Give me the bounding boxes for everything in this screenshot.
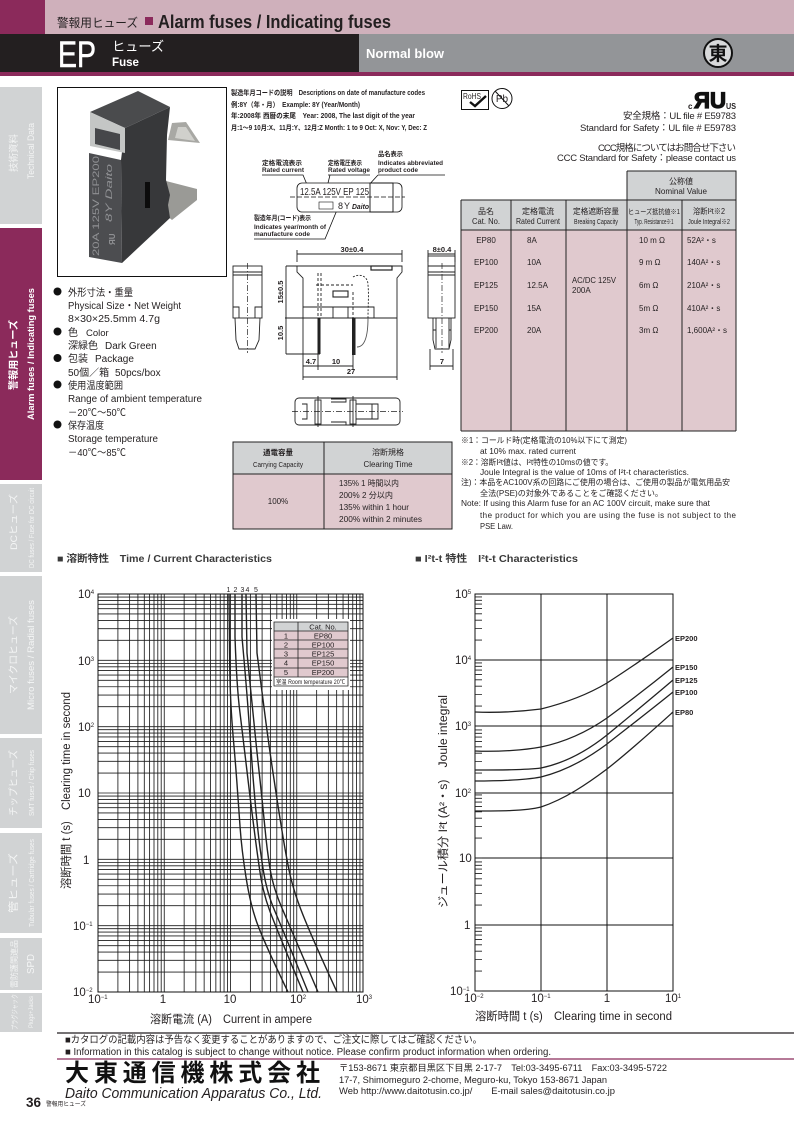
axis labels: 10	[88, 994, 101, 1006]
axis labels: 1	[604, 993, 610, 1005]
curve labels: EP150	[675, 663, 698, 672]
product photo: EP fuse: 8Y Daito	[104, 164, 114, 222]
specification list: －40℃～85℃	[68, 448, 126, 459]
dimension drawing: front view: 27	[347, 367, 355, 376]
side navigation tabs: SMT fuses / Chip fuses	[27, 750, 36, 816]
icon: lead free	[492, 88, 512, 108]
axis labels	[73, 589, 373, 1006]
page number: 36	[26, 1094, 41, 1110]
legend panel: 4	[284, 658, 288, 668]
heading: EP fuse	[58, 34, 164, 75]
side navigation tabs: 技術資料	[8, 134, 20, 172]
dimension drawing: front view: 15±0.5	[276, 281, 285, 303]
dimension drawing: front view	[276, 245, 452, 380]
curve labels	[675, 634, 698, 717]
fuse marking diagram	[254, 149, 445, 239]
table: ratings: 5m Ω	[639, 304, 658, 313]
footnotes: at 10% max. rated current	[480, 447, 577, 456]
table: ratings: EP200	[474, 326, 499, 335]
icon: UL mark: ЯU	[694, 88, 726, 113]
table: ratings: 10 m Ω	[639, 236, 665, 245]
specification list: Range of ambient temperature	[68, 394, 202, 405]
manufacture date code description: 年:2008年 西暦の末尾 Year: 2008, The last digit of the year	[231, 111, 415, 120]
table: carrying capacity and clearing time: 135% 1 時間以内	[339, 478, 399, 488]
table: carrying capacity and clearing time: 通電容量	[263, 447, 293, 457]
table: carrying capacity and clearing time: Clearing Time	[364, 460, 413, 469]
icon: RoHS	[462, 90, 488, 110]
fuse marking diagram: Rated voltage	[328, 167, 370, 174]
table: carrying capacity and clearing time: 100%	[268, 497, 288, 506]
fuse marking diagram: 定格電流表示	[262, 158, 303, 167]
curve numbers: 2	[234, 587, 238, 594]
axis labels: 10	[224, 994, 236, 1006]
company address: 17-7, Shimomeguro 2-chome, Meguro-ku, Tokyo 153-8671 Japan	[339, 1075, 607, 1085]
side navigation tabs: 雷防護関連品	[9, 940, 19, 988]
specification list: Dark Green	[105, 341, 157, 352]
heading: I2t characteristics: ■ I²t-t 特性 I²t-t Characteristics	[415, 552, 578, 565]
axis labels: 1	[160, 994, 166, 1006]
heading: normal blow: Normal blow	[366, 46, 445, 61]
legend panel: 1	[284, 632, 288, 640]
heading: EP fuse: Fuse	[112, 55, 139, 69]
side navigation tabs	[0, 87, 42, 1032]
heading: time current characteristics: ■ 溶断特性 Time / Current Characteristics	[57, 552, 272, 565]
table: ratings: 8A	[527, 236, 537, 245]
table: ratings: Breaking Capacity	[574, 219, 618, 226]
specification list: Package	[95, 354, 134, 365]
table: ratings: 3m Ω	[639, 326, 658, 335]
axis labels: 10	[464, 993, 477, 1005]
fuse marking diagram: 8Y	[338, 201, 350, 211]
axis labels: 10	[455, 589, 468, 601]
curve labels: EP125	[675, 676, 698, 685]
legend panel: EP150	[312, 658, 334, 668]
heading: EP fuse: ヒューズ	[112, 39, 164, 54]
curve numbers: 1	[227, 587, 231, 594]
table: ratings: EP100	[474, 258, 499, 267]
dimension drawing: front view: 10	[332, 357, 340, 366]
icon: company crest	[704, 39, 732, 67]
table: ratings: 公称値	[669, 176, 693, 186]
axis labels: 10	[455, 655, 468, 667]
table: ratings: 9 m Ω	[639, 258, 661, 267]
footnotes: 注)：本品をAC100V系の回路にご使用の場合は、ご使用の製品が電気用品安	[461, 477, 730, 487]
fuse marking diagram: manufacture code	[254, 231, 310, 238]
footer notice: ■カタログの記載内容は予告なく変更することがありますので、ご注文に際してはご確認ください。	[65, 1033, 482, 1046]
table: ratings: 210A²・s	[687, 281, 720, 290]
specification list: 色	[68, 328, 78, 339]
curves	[229, 594, 337, 992]
footnotes: PSE Law.	[480, 522, 513, 531]
axis labels: 1	[464, 920, 470, 932]
specification list: Color	[86, 328, 109, 339]
icon: RoHS: RoHS	[463, 92, 481, 101]
specification list: Storage temperature	[68, 434, 158, 445]
table: ratings: 10A	[527, 258, 542, 267]
specification list: 8×30×25.5mm 4.7g	[68, 314, 160, 325]
table: carrying capacity and clearing time: 200% within 2 minutes	[339, 515, 422, 524]
heading: category title	[57, 12, 391, 32]
footnotes: Note: If using this Alarm fuse for an AC 100V circuit, make sure that	[461, 499, 711, 508]
footnotes: ※2：溶断I²t値は、I²t特性の10msの値です。	[461, 457, 613, 467]
fuse marking diagram: 12.5A 125V EP 125	[300, 186, 369, 198]
axis labels: 10	[665, 993, 678, 1005]
chart: time current characteristics: 溶断時間 t (s) Clearing time in second	[60, 692, 73, 889]
table: carrying capacity and clearing time: 200% 2 分以内	[339, 490, 393, 500]
table: ratings: 6m Ω	[639, 281, 658, 290]
side navigation tabs: 警報用ヒューズ	[7, 320, 20, 390]
table: ratings: Typ. Resistance※1	[634, 218, 674, 226]
axis labels: 10	[455, 721, 468, 733]
side navigation tabs: Technical Data	[26, 123, 36, 179]
legend panel: EP100	[312, 640, 334, 650]
icon: UL mark	[688, 88, 737, 113]
table: ratings: EP80	[476, 236, 496, 245]
table: carrying capacity and clearing time: 135% within 1 hour	[339, 503, 409, 512]
curve numbers: 3	[241, 587, 245, 594]
footnotes: ※1：コールド時(定格電流の10%以下にて測定)	[461, 435, 627, 445]
specification list: Physical Size・Net Weight	[68, 301, 181, 312]
footnotes: Joule Integral is the value of 10ms of I²t-t characteristics.	[480, 468, 689, 477]
table: ratings: EP125	[474, 281, 499, 290]
manufacture date code description: 月:1〜9 10月:X、11月:Y、12月:Z Month: 1 to 9 Oct: X, Nov: Y, Dec: Z	[231, 124, 428, 132]
table: ratings: 1,600A²・s	[687, 326, 727, 335]
footer notice: ■ Information in this catalog is subject to change without notice. Please confirm product information when ordering.	[65, 1047, 551, 1058]
product photo: EP fuse: ЯU	[108, 233, 117, 245]
curve numbers: 4	[246, 587, 250, 594]
axis labels: 10	[450, 986, 463, 998]
company address: 〒153-8671 東京都目黒区下目黒 2-17-7 Tel:03-3495-6711 Fax:03-3495-5722	[339, 1062, 667, 1073]
table: ratings: 15A	[527, 304, 542, 313]
header band	[0, 0, 794, 76]
curve labels: EP80	[675, 708, 693, 717]
legend panel: 3	[284, 650, 288, 658]
table: ratings: 140A²・s	[687, 258, 720, 267]
side navigation tabs: 管ヒューズ	[7, 853, 20, 913]
dimension drawing: front view: 30±0.4	[341, 245, 364, 254]
icon: company crest: 東	[708, 43, 728, 65]
axis labels: 10	[78, 788, 91, 800]
axis labels: 3	[468, 722, 472, 728]
axis labels: −1	[544, 994, 551, 1000]
specification list	[54, 286, 202, 459]
table: ratings: 定格遮断容量	[573, 206, 619, 216]
safety standards text: 安全規格：UL file # E59783	[623, 110, 736, 122]
specification list: －20℃～50℃	[68, 408, 126, 419]
dimension drawing: bottom view	[292, 396, 403, 427]
axis labels: 4	[468, 656, 472, 662]
side navigation tabs: Plugs+Jacks	[29, 996, 35, 1028]
dimension drawing: front view: 10.5	[276, 326, 285, 340]
specification list: 外形寸法・重量	[68, 286, 133, 299]
manufacture date code description: 製造年月コードの説明 Descriptions on date of manufacture codes	[231, 88, 425, 97]
curve numbers	[227, 587, 258, 594]
axis labels: 4	[91, 590, 95, 596]
footnotes: 全法(PSE)の対象外であることをご確認ください。	[480, 488, 663, 498]
table: ratings: Rated Current	[516, 217, 561, 226]
product photo: EP fuse: 20A 125V EP200	[91, 156, 101, 256]
curve labels: EP200	[675, 634, 698, 643]
axis labels: 3	[91, 657, 95, 663]
manufacture date code description	[231, 88, 428, 132]
specification list: 50pcs/box	[115, 368, 161, 379]
fuse marking diagram: Indicates abbreviated	[378, 160, 443, 167]
axis labels	[450, 589, 682, 1005]
chart: I2t characteristics: 溶断時間 t (s) Clearing time in second	[475, 1010, 672, 1023]
table: ratings: 品名	[478, 206, 494, 216]
axis labels: 2	[303, 995, 307, 1001]
axis labels: 10	[73, 987, 86, 999]
safety standards text: CCC規格についてはお問合せ下さい	[598, 142, 736, 154]
heading: category title: 警報用ヒューズ	[57, 15, 138, 30]
curves	[475, 638, 673, 811]
axis labels: −1	[463, 987, 470, 993]
fuse marking diagram: 製造年月(コード)表示	[254, 213, 311, 222]
axis labels: 10	[290, 994, 303, 1006]
axis labels: 1	[83, 855, 89, 867]
table: ratings: Joule Integral※2	[688, 218, 730, 226]
side navigation tabs: チップヒューズ	[7, 750, 20, 816]
legend panel	[272, 619, 350, 690]
chart: I2t characteristics	[436, 589, 698, 1023]
side navigation tabs: DCヒューズ	[8, 493, 20, 550]
table: ratings: Nominal Value	[655, 187, 708, 196]
company logo: Daito Communication Apparatus Co., Ltd.	[65, 1085, 322, 1102]
axis labels: 10	[73, 921, 86, 933]
page number: 警報用ヒューズ	[46, 1100, 86, 1108]
legend panel: 室温 Room temperature 20℃	[276, 678, 345, 686]
side navigation tabs: Alarm fuses / Indicating fuses	[26, 288, 36, 420]
company address: Web http://www.daitotusin.co.jp/ E-mail sales@daitotusin.co.jp	[339, 1086, 615, 1096]
axis labels: −1	[101, 995, 108, 1001]
icon: lead free: Pb	[496, 94, 509, 105]
page number	[26, 1094, 86, 1110]
legend panel: 2	[284, 640, 288, 650]
side navigation tabs: Tubular fuses / Cartridge fuses	[27, 839, 36, 927]
specification list: 使用温度範囲	[68, 379, 123, 392]
table: ratings: 溶断I²t※2	[693, 206, 725, 216]
axis labels: 1	[678, 994, 682, 1000]
axis labels: −2	[477, 994, 484, 1000]
table: carrying capacity and clearing time: Carrying Capacity	[253, 460, 303, 469]
axis labels: 5	[468, 590, 472, 596]
table: ratings: Cat. No.	[472, 217, 500, 226]
fuse marking diagram: 定格電圧表示	[328, 158, 362, 167]
company logo: 大東通信機株式会社	[65, 1060, 320, 1087]
curve numbers: 5	[254, 587, 258, 594]
table: ratings: 20A	[527, 326, 542, 335]
side navigation tabs: Micro fuses / Radial fuses	[26, 599, 36, 710]
dimension drawing: front view: 4.7	[306, 357, 316, 366]
product photo: EP fuse	[58, 88, 226, 276]
specification list: 保存温度	[68, 419, 104, 432]
company logo	[65, 1060, 322, 1102]
safety standards text: CCC Standard for Safety：please contact us	[557, 153, 736, 164]
fuse marking diagram: Indicates year/month of	[254, 224, 327, 231]
axis labels: 10	[78, 656, 91, 668]
dimension drawing: front view: 8±0.4	[433, 245, 452, 254]
axis labels: 10	[78, 722, 91, 734]
table: ratings: 52A²・s	[687, 236, 716, 245]
table: ratings: 410A²・s	[687, 304, 720, 313]
table: ratings: 200A	[572, 286, 591, 295]
icon: UL mark: c	[688, 102, 693, 111]
axis labels: 10	[459, 853, 472, 865]
footer notice	[57, 1033, 794, 1059]
specification list: 深緑色	[68, 341, 98, 352]
legend panel: EP200	[312, 668, 334, 677]
fuse marking diagram: Rated current	[262, 167, 305, 174]
side navigation tabs: SPD	[26, 954, 37, 974]
side navigation tabs: プラグジャック	[10, 994, 19, 1030]
axis labels: 10	[455, 788, 468, 800]
chart: time current characteristics: 溶断電流 (A) Current in ampere	[150, 1013, 312, 1026]
safety standards text: Standard for Safety：UL file # E59783	[580, 123, 736, 134]
footnotes: the product for which you are using the fuse is not subject to the	[480, 511, 737, 520]
axis labels: 10	[78, 589, 91, 601]
side navigation tabs: DC fuses / Fuse for DC circuit	[29, 488, 36, 568]
legend panel: Cat. No.	[309, 622, 337, 632]
fuse marking diagram: product code	[378, 167, 418, 174]
footnotes	[461, 435, 737, 531]
chart: I2t characteristics: ジュール積分 I²t (A²・s) Joule integral	[436, 695, 450, 908]
dimension drawing: side views	[233, 250, 455, 370]
fuse marking diagram: 品名表示	[378, 149, 403, 158]
axis labels: 10	[356, 994, 369, 1006]
axis labels: 3	[369, 995, 373, 1001]
table: ratings: AC/DC 125V	[572, 276, 617, 285]
fuse marking diagram: Daito	[352, 202, 369, 211]
table: carrying capacity and clearing time: 溶断規格	[372, 447, 404, 457]
table: ratings: 定格電流	[522, 206, 554, 216]
specification list: 包装	[68, 354, 88, 365]
safety standards text	[557, 110, 736, 164]
axis labels: 10	[531, 993, 544, 1005]
curve labels: EP100	[675, 688, 698, 697]
table: carrying capacity and clearing time	[233, 442, 452, 529]
chart: time current characteristics	[60, 587, 373, 1026]
axis labels: −2	[86, 988, 93, 994]
table: ratings: ヒューズ抵抗値※1	[628, 207, 680, 216]
table: ratings: 12.5A	[527, 281, 549, 290]
legend panel: EP80	[314, 632, 332, 640]
heading: category title: Alarm fuses / Indicating fuses	[158, 12, 391, 32]
manufacture date code description: 例:8Y（年・月） Example: 8Y (Year/Month)	[231, 100, 360, 109]
axis labels: −1	[86, 922, 93, 928]
heading: EP fuse: EP	[58, 34, 96, 75]
side navigation tabs: マイクロヒューズ	[7, 616, 20, 694]
specification list: 50個／箱	[68, 368, 109, 379]
dimension drawing: front view: 7	[440, 357, 444, 366]
axis labels: 2	[91, 723, 95, 729]
legend panel: 5	[284, 668, 288, 677]
icon: UL mark: US	[726, 102, 737, 111]
table: ratings	[461, 171, 736, 431]
legend panel: EP125	[312, 650, 334, 658]
table: ratings: EP150	[474, 304, 499, 313]
company address	[339, 1062, 667, 1096]
axis labels: 2	[468, 789, 472, 795]
